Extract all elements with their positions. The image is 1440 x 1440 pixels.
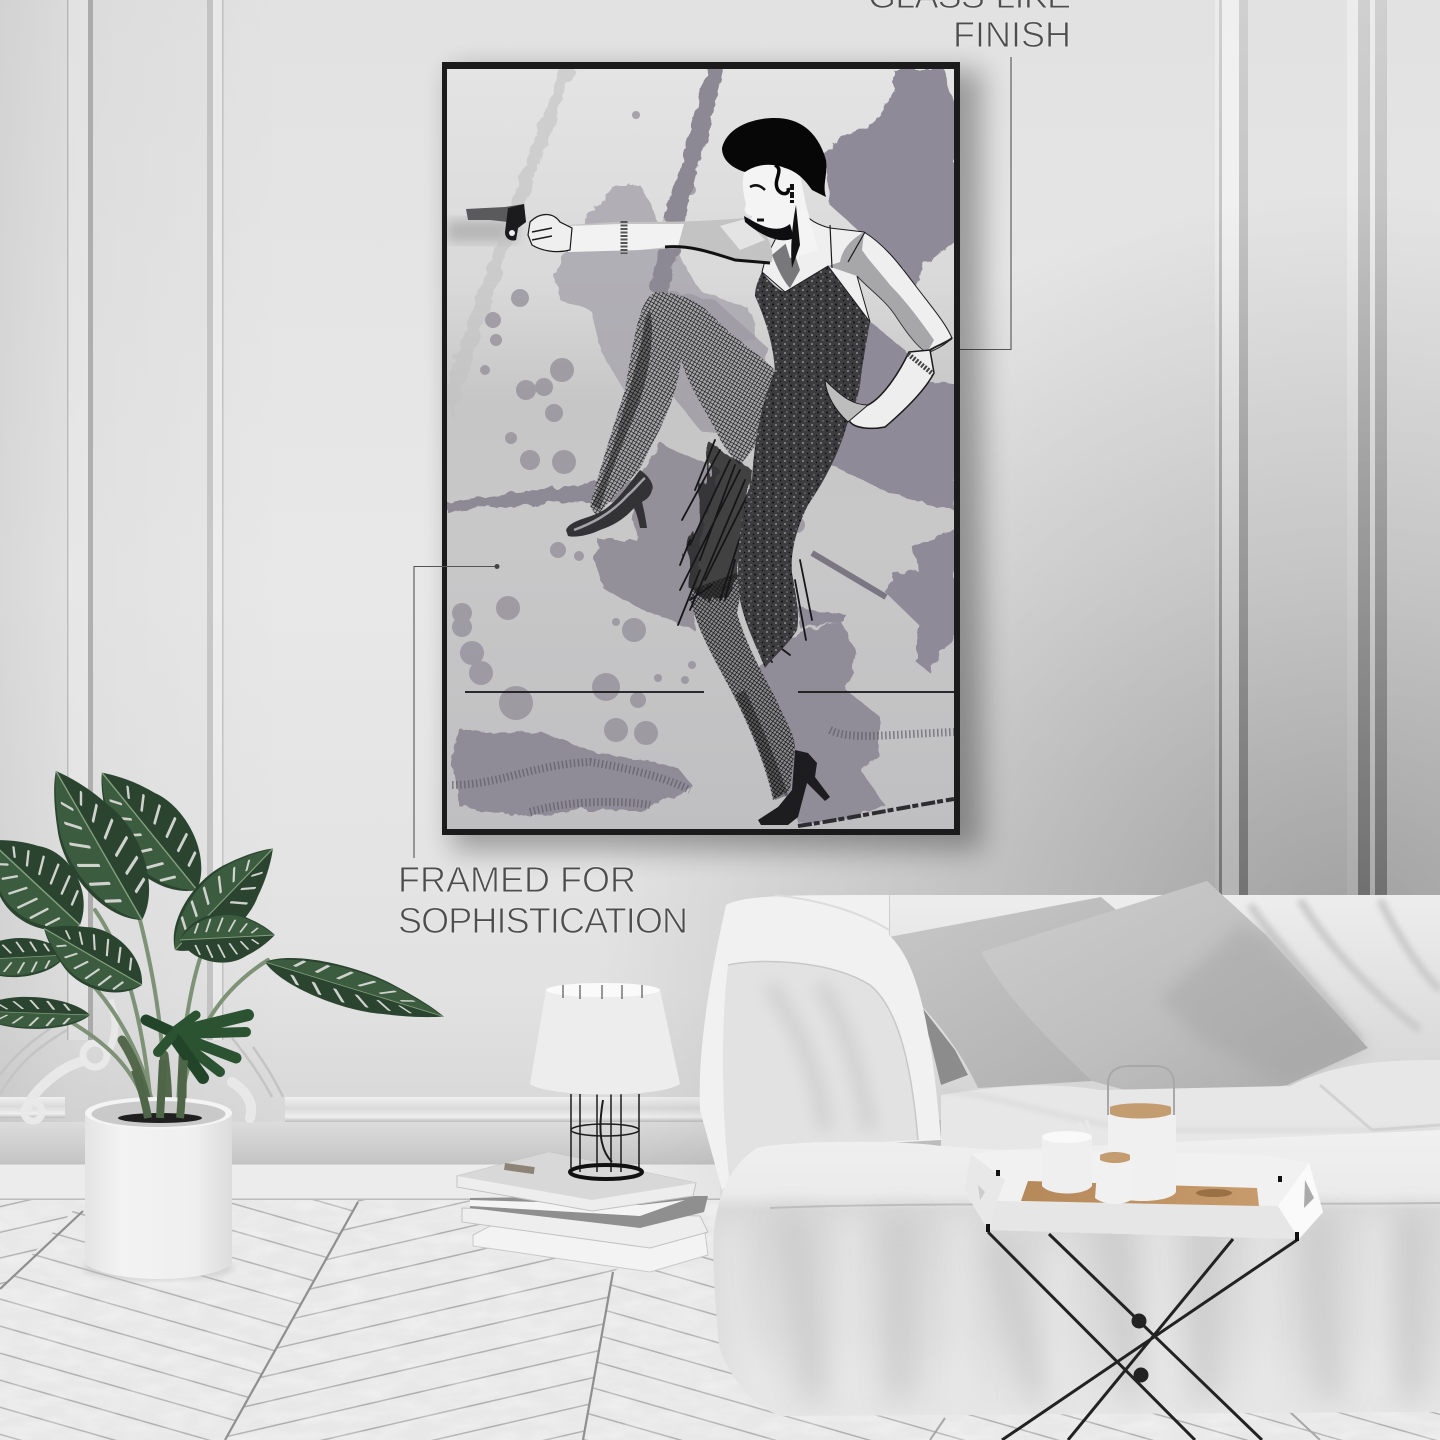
ground streak — [798, 799, 954, 826]
marble herringbone floor — [0, 1200, 1440, 1440]
small jar — [1095, 1152, 1134, 1204]
figure: extended arm — [568, 218, 772, 263]
paint splatter — [452, 111, 805, 745]
figure: feather fringe — [678, 440, 812, 662]
white planter pot — [82, 1060, 234, 1280]
leaf top large — [74, 750, 225, 912]
leaf top dark — [25, 753, 173, 938]
folding tray table — [964, 1066, 1323, 1440]
leaf left lower — [0, 995, 91, 1031]
callout: framed for sophistication: SOPHISTICATION — [398, 900, 688, 941]
stack of books — [457, 1152, 708, 1272]
figure: raised leg — [590, 292, 777, 514]
callout: glass-like finish: FINISH — [953, 14, 1071, 55]
wall shadow toward the sofa — [600, 0, 1440, 1200]
leaf right middle — [179, 910, 276, 965]
tray — [964, 1150, 1323, 1241]
monstera plant — [0, 750, 450, 1118]
seat cushions — [941, 1060, 1440, 1180]
figure: revolver — [466, 204, 526, 241]
front cushion — [713, 1130, 1440, 1416]
figure: face and neck — [743, 164, 810, 268]
figure: torso and raised arm — [762, 218, 953, 352]
leaf left middle — [0, 936, 67, 980]
horizon line — [465, 691, 954, 693]
dark gap beside pillow — [917, 1001, 968, 1085]
left arm — [700, 895, 941, 1190]
plaster arches and scrolls — [0, 1018, 283, 1097]
leaf far left — [0, 813, 105, 952]
plant stems — [40, 910, 268, 1118]
baseboard — [0, 1164, 720, 1200]
figure: standing shoe — [758, 750, 830, 825]
figure: forearm on hip — [825, 338, 952, 428]
large canister — [1108, 1103, 1176, 1201]
jar handle — [1108, 1066, 1174, 1115]
figure: hair — [722, 118, 826, 203]
front pillow — [981, 881, 1368, 1103]
framed artwork — [442, 62, 982, 850]
white sofa — [700, 881, 1440, 1416]
back pillow — [868, 897, 1180, 1088]
callout: framed for sophistication: FRAMED FOR — [398, 859, 636, 900]
leaf long right — [259, 943, 450, 1035]
cup with brushes — [1042, 1120, 1092, 1194]
lower wall band — [0, 1122, 720, 1165]
figure: raised shoe — [566, 470, 653, 537]
leaf right upper — [155, 829, 293, 970]
callout: framed for sophistication — [398, 564, 688, 941]
table legs — [988, 1232, 1297, 1440]
wash speckle — [452, 730, 954, 812]
table lamp — [530, 983, 680, 1179]
figure: dress — [738, 266, 870, 668]
callout: glass-like finish — [868, 0, 1071, 350]
sofa back — [880, 895, 1440, 1120]
leaf low fan — [146, 1015, 248, 1078]
figure: standing leg — [690, 570, 795, 800]
figure: gun hand — [528, 214, 572, 252]
leaf left inner — [30, 904, 156, 1010]
